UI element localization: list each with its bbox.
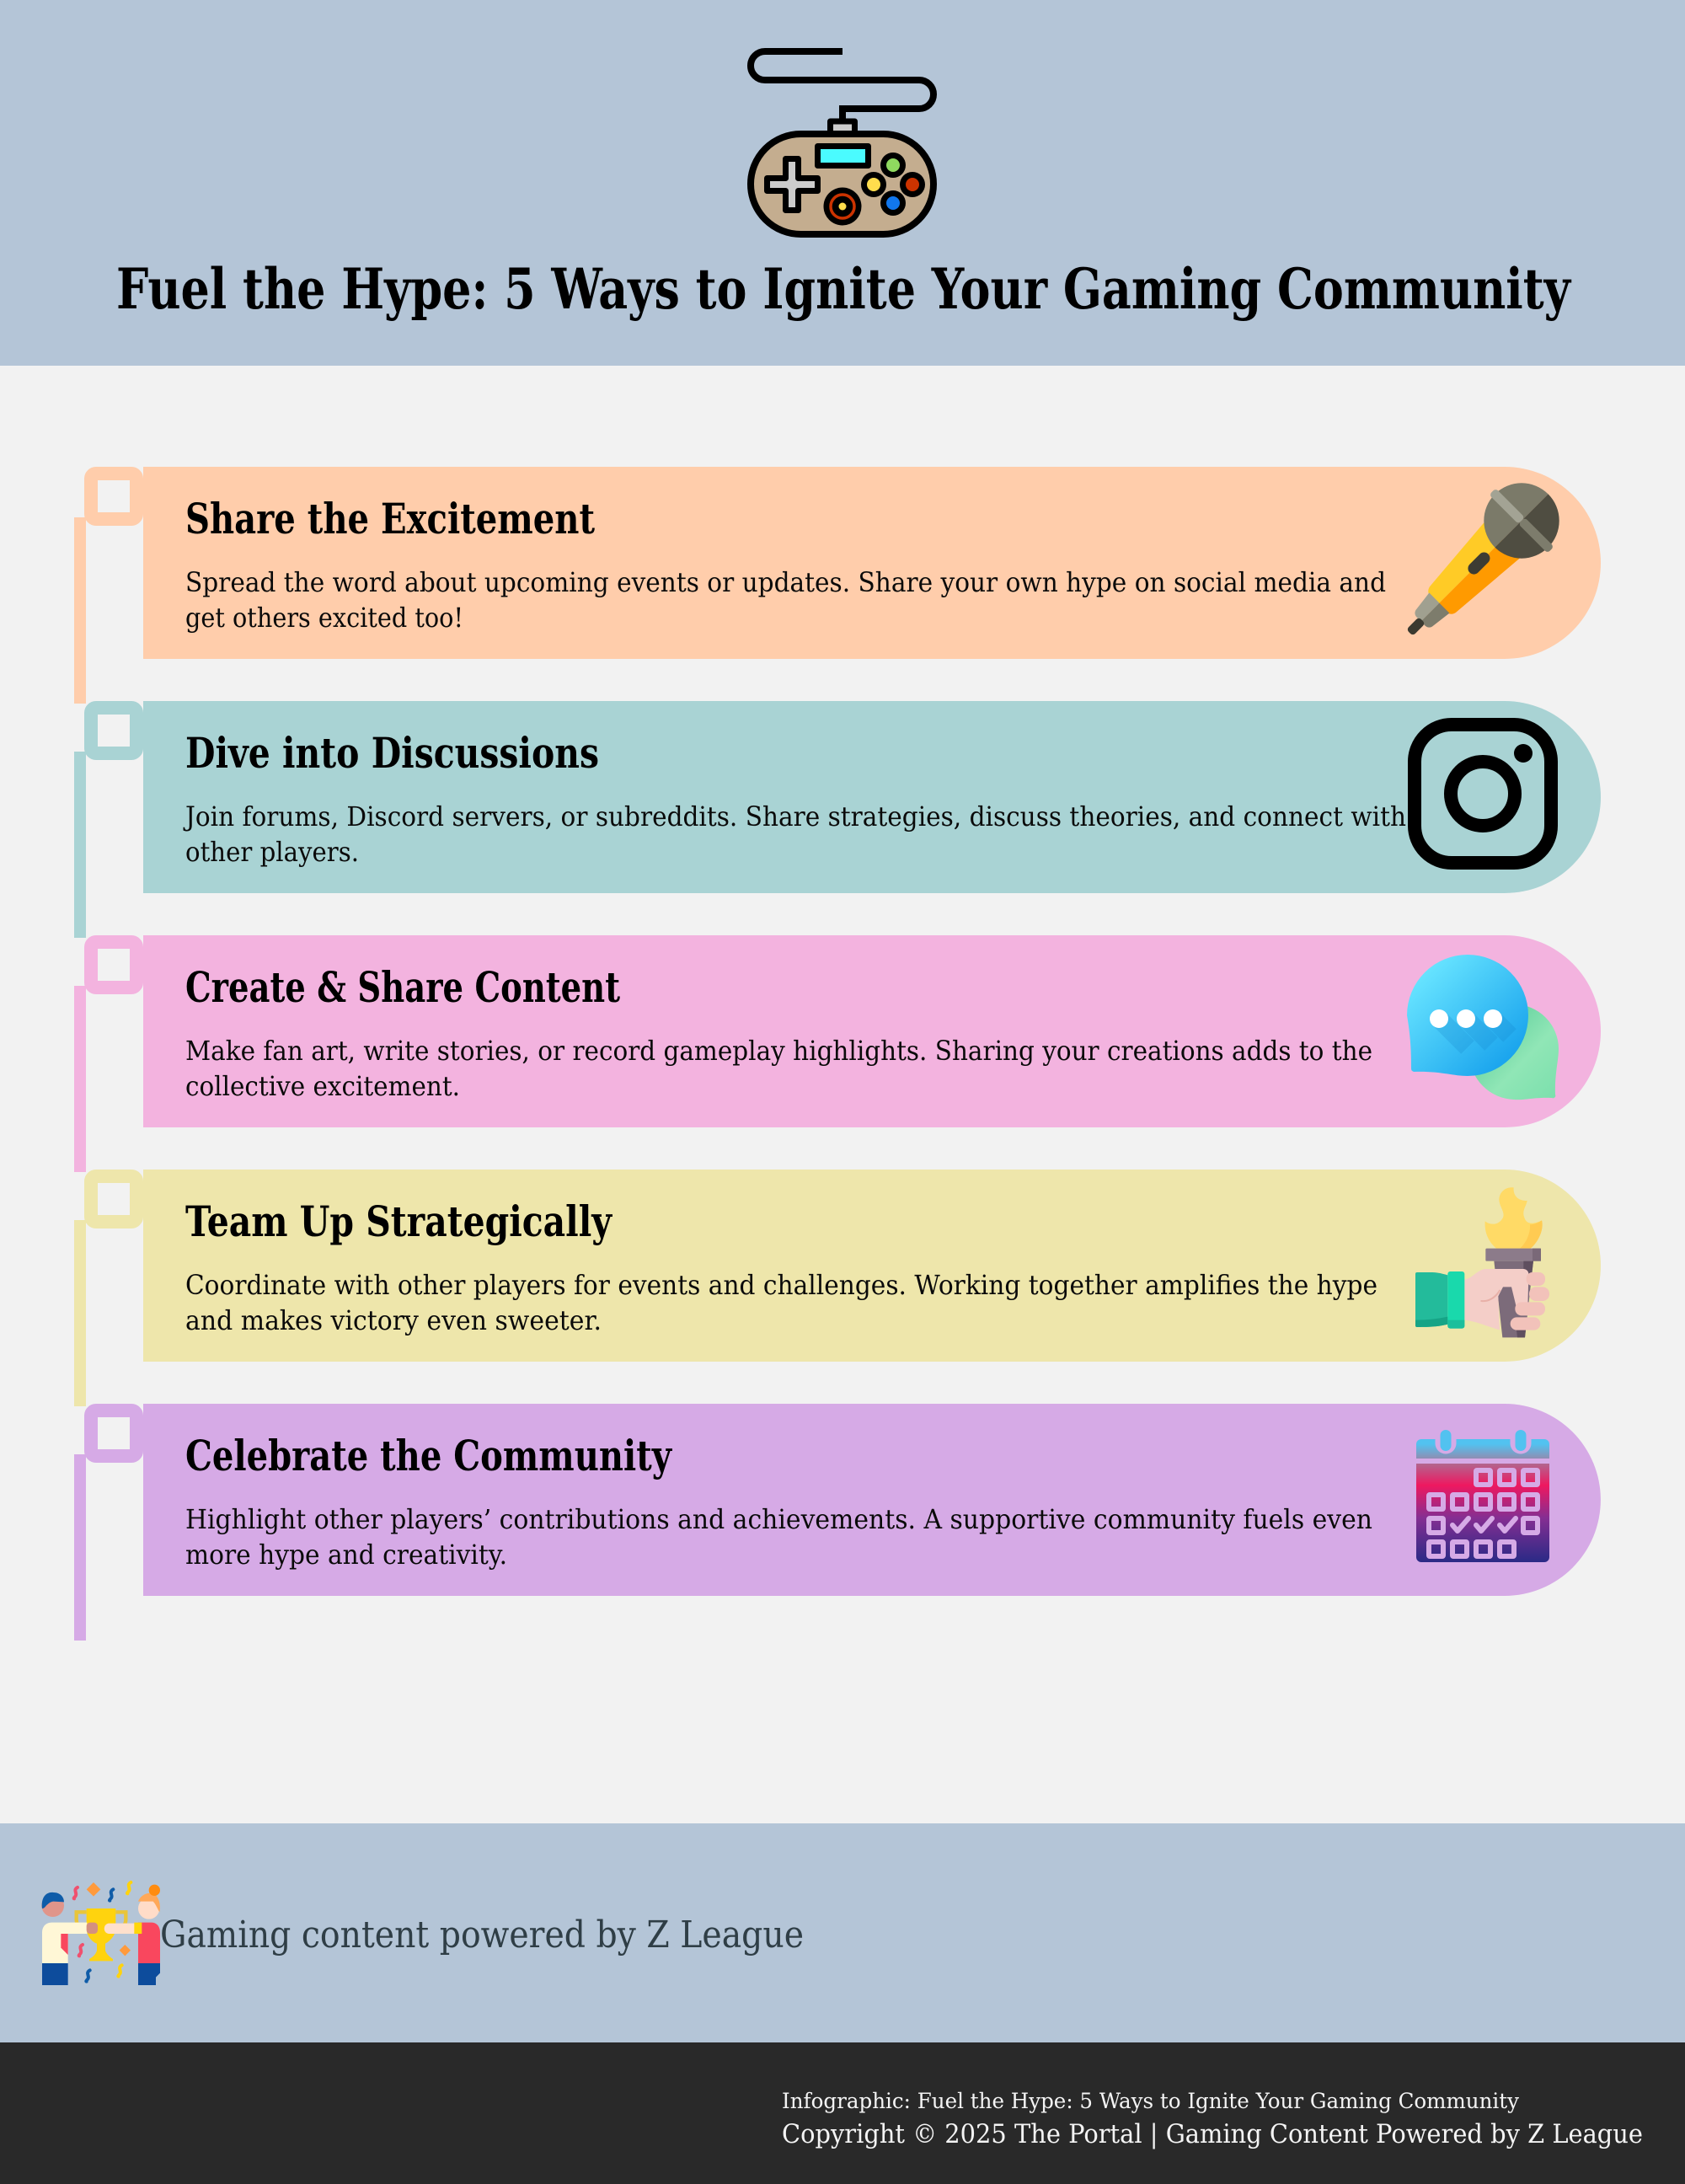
copyright bar	[0, 2042, 1685, 2184]
body text	[185, 566, 1386, 634]
header band	[0, 0, 1685, 366]
body text: more hype and creativity.	[185, 1539, 507, 1571]
icon: calendar	[1416, 1425, 1549, 1562]
body text	[185, 1503, 1372, 1571]
body text: and makes victory even sweeter.	[185, 1304, 602, 1336]
icon: game controller	[751, 51, 933, 234]
icon: microphone	[1380, 465, 1577, 662]
footer band	[0, 1823, 1685, 2042]
step marker	[91, 708, 136, 753]
step marker	[91, 474, 136, 519]
heading: Create & Share Content	[185, 962, 620, 1012]
body text: Coordinate with other players for events and challenges. Working together amplifies the hype	[185, 1269, 1377, 1301]
panel: Celebrate the Community	[74, 1404, 1601, 1641]
body text: Join forums, Discord servers, or subreddits. Share strategies, discuss theories, and connect with	[183, 800, 1406, 832]
heading: Dive into Discussions	[185, 728, 599, 778]
panel: Team Up Strategically	[74, 1170, 1601, 1406]
step marker	[91, 1410, 136, 1456]
heading: Team Up Strategically	[185, 1196, 613, 1246]
body text: Spread the word about upcoming events or updates. Share your own hype on social media and	[185, 566, 1386, 598]
body text: other players.	[185, 836, 359, 868]
body text	[185, 1035, 1372, 1102]
infographic caption: Infographic: Fuel the Hype: 5 Ways to Ignite Your Gaming Community	[782, 2089, 1520, 2113]
copyright line: Copyright © 2025 The Portal | Gaming Content Powered by Z League	[782, 2119, 1643, 2149]
body text	[183, 800, 1406, 868]
panel: Share the Excitement	[74, 465, 1601, 704]
step marker	[91, 1176, 136, 1222]
body text: get others excited too!	[185, 602, 463, 634]
icon: chat bubbles	[1407, 955, 1559, 1100]
heading: Share the Excitement	[185, 494, 595, 543]
body text	[185, 1269, 1377, 1336]
heading: Celebrate the Community	[185, 1431, 673, 1480]
step marker	[91, 942, 136, 988]
icon: instagram logo	[1415, 725, 1551, 863]
body text: collective excitement.	[185, 1070, 460, 1102]
sponsor text: Gaming content powered by Z League	[160, 1914, 804, 1956]
icon: hand holding torch	[1415, 1187, 1549, 1337]
body text: Highlight other players’ contributions and achievements. A supportive community fuels even	[185, 1503, 1372, 1535]
body text: Make fan art, write stories, or record gameplay highlights. Sharing your creations adds to the	[185, 1035, 1372, 1067]
panel: Create & Share Content	[74, 935, 1601, 1172]
panel: Dive into Discussions	[74, 701, 1601, 938]
icon: two players and trophy	[41, 1882, 160, 1985]
